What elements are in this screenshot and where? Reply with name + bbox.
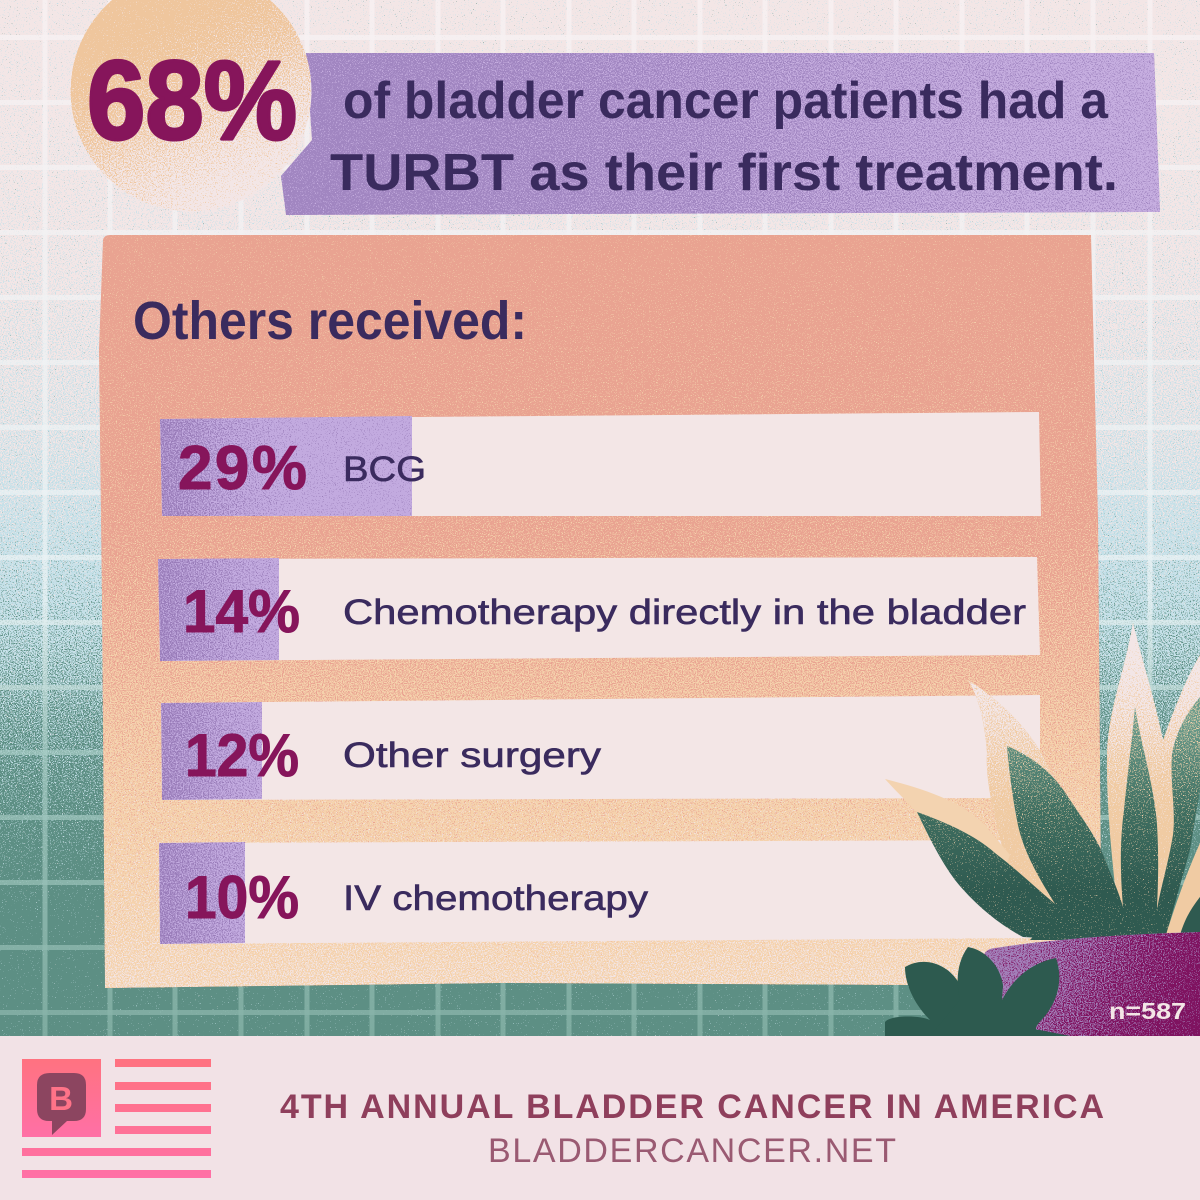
bar: IV chemotherapy 10% (159, 840, 1040, 944)
stat value: 68% (87, 38, 297, 163)
peach back leaves (885, 623, 1200, 935)
bar: BCG 29%: BCG (343, 450, 426, 489)
bar: other surgery 12% (161, 695, 1040, 800)
panel: others received (99, 235, 1102, 1000)
panel heading: Others received: (133, 291, 527, 351)
small dark leaves (885, 947, 1070, 1036)
illustration: potted plant (885, 623, 1200, 1036)
bar: BCG 29%: 29% (178, 434, 307, 503)
bar: chemotherapy directly in the bladder 14%: 14% (183, 578, 300, 645)
bar: other surgery 12%: Other surgery (343, 736, 602, 775)
headline banner (281, 53, 1160, 215)
headline line 1: of bladder cancer patients had a (343, 72, 1109, 130)
headline line 2: TURBT as their first treatment. (330, 144, 1118, 202)
green front leaves (917, 697, 1200, 940)
bar: chemotherapy directly in the bladder 14% (158, 557, 1040, 661)
footer title: 4TH ANNUAL BLADDER CANCER IN AMERICA (280, 1088, 1104, 1126)
sample size note: n=587 (1109, 998, 1186, 1024)
bar: IV chemotherapy 10%: IV chemotherapy (343, 879, 649, 918)
bar: other surgery 12%: 12% (185, 722, 299, 789)
footer band (0, 1036, 1200, 1200)
bar: chemotherapy directly in the bladder 14%: Chemotherapy directly in the bladder (343, 593, 1026, 632)
pot (983, 932, 1200, 1036)
stat circle: 68% (70, 0, 312, 212)
bar: BCG 29% (160, 412, 1041, 516)
bar: IV chemotherapy 10%: 10% (185, 864, 299, 931)
icon: logo newspaper: B (49, 1080, 73, 1117)
footer url: BLADDERCANCER.NET (488, 1132, 896, 1170)
icon: logo newspaper (22, 1059, 211, 1178)
